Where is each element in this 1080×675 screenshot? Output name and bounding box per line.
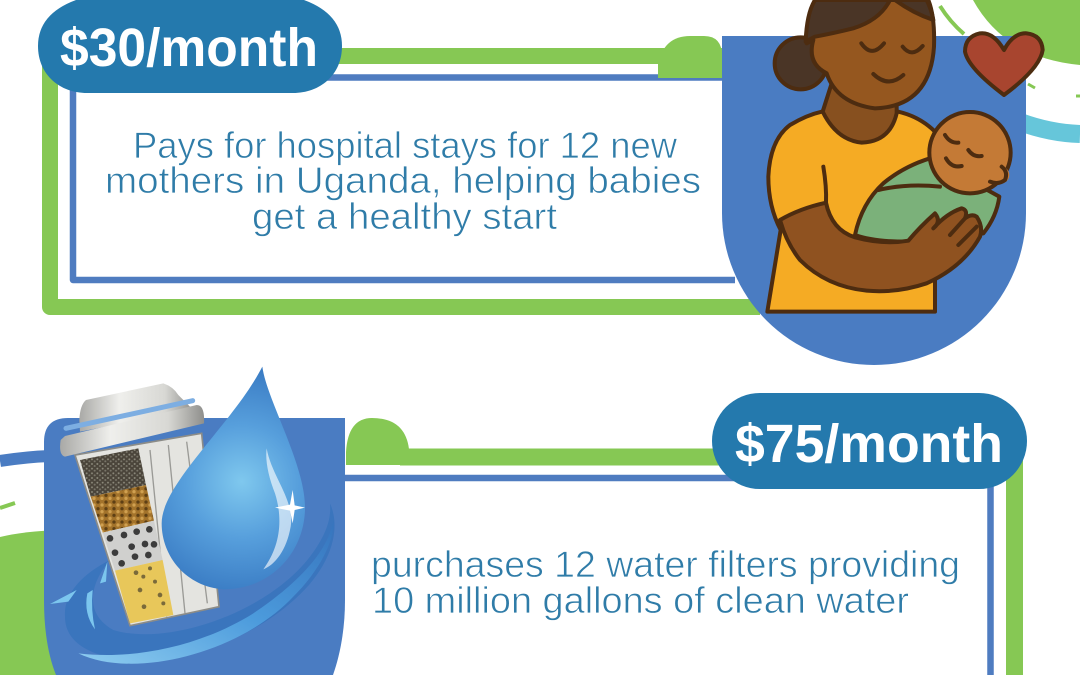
arm and hand: [780, 203, 981, 291]
blue badge shape: [722, 36, 1026, 365]
description text: [371, 544, 960, 621]
description text: 10 million gallons of clean water: [372, 580, 909, 621]
description text: purchases 12 water filters providing: [371, 544, 960, 585]
price pill: [712, 393, 1027, 489]
green frame: [400, 457, 1014, 675]
neck: [823, 83, 897, 143]
background decoration: top right circle and arcs: [940, 0, 1080, 134]
filter lid top: [79, 383, 193, 432]
head: [807, 0, 934, 108]
layer: brown gravel: [91, 485, 154, 533]
green tab: [346, 418, 420, 465]
green frame: [50, 56, 760, 307]
description text: Pays for hospital stays for 12 new: [133, 125, 677, 166]
filter ribs: [150, 442, 207, 617]
panel: $75/month: [44, 393, 1027, 675]
sparkle: [275, 490, 305, 523]
layer: yellow sand: [115, 560, 173, 623]
green tab: [658, 36, 722, 78]
inner blue frame: [340, 478, 990, 675]
blue seal: [66, 401, 193, 428]
baby wrap: [855, 158, 999, 242]
icon: mother holding baby: [767, 0, 1043, 312]
drop highlight: [263, 448, 291, 569]
face: [861, 43, 923, 81]
swirl front: [78, 520, 333, 664]
icon: water filter and drop: [50, 367, 335, 664]
water drop: [162, 367, 305, 589]
filter body: [75, 433, 219, 626]
layer: gray gravel: [103, 521, 163, 571]
description text: [105, 125, 701, 237]
filter lid ring: [60, 405, 204, 457]
price pill: [38, 0, 342, 93]
background decoration: bottom left circle and arc: [0, 456, 60, 675]
hair: [806, 0, 933, 42]
baby head: [929, 112, 1011, 193]
heart: [965, 33, 1043, 95]
layer: charcoal: [80, 448, 146, 497]
baby face: [945, 135, 1006, 183]
description text: get a healthy start: [252, 196, 558, 237]
price label: $30/month: [60, 18, 318, 78]
blue badge shape: [44, 418, 345, 675]
price label: $75/month: [735, 414, 1003, 474]
panel: $30/month: [38, 0, 1026, 365]
shirt: [767, 112, 935, 312]
baby ear: [992, 166, 1009, 184]
swirl back: [65, 503, 335, 660]
inner blue frame: [73, 78, 735, 280]
description text: mothers in Uganda, helping babies: [105, 160, 701, 201]
swirl accents: [50, 562, 107, 629]
hair bun: [775, 37, 827, 89]
